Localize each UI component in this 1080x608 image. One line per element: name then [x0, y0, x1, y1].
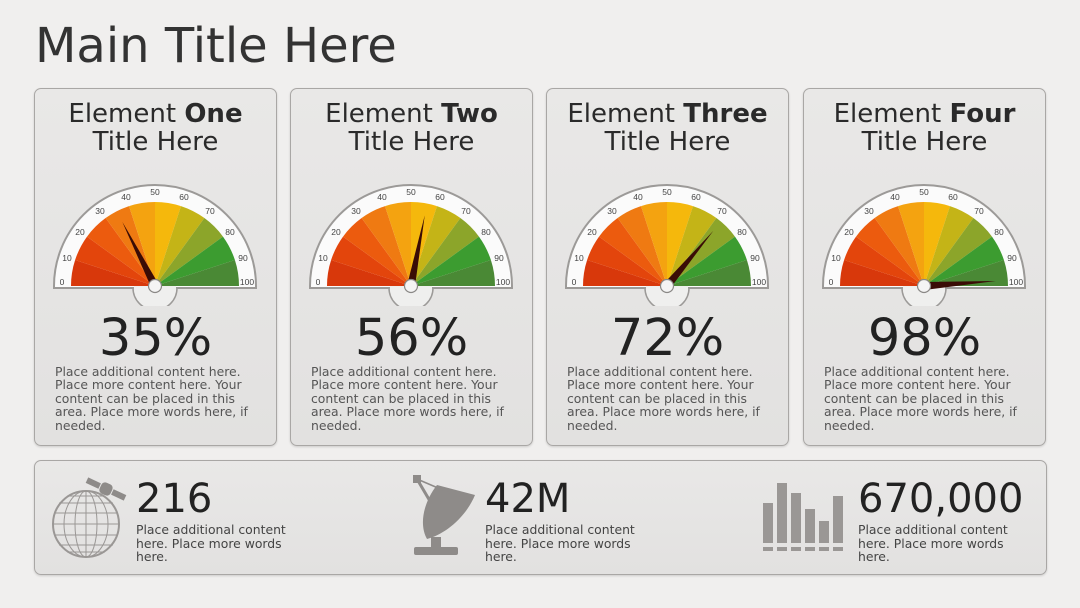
gauge — [309, 184, 513, 306]
panel title: Title Here — [349, 127, 474, 157]
panel title: Element Four — [834, 99, 1015, 129]
panel title — [834, 99, 1016, 157]
panel: element one — [34, 88, 277, 446]
panel: element four — [803, 88, 1046, 446]
stat: 670,000: 670,000 — [858, 476, 1023, 522]
panel title: Element Two — [325, 99, 498, 129]
panel title: Title Here — [605, 127, 730, 157]
stat text: Place additional content here. Place more words here. — [858, 522, 1008, 564]
icon: globe with satellite — [52, 478, 126, 558]
panel: element three — [546, 88, 789, 446]
stat: 216: 216 — [136, 476, 212, 522]
body text: Place additional content here. Place more content here. Your content can be placed in this area. Place more words here, if needed. — [311, 364, 504, 433]
percent: 35% — [99, 309, 212, 368]
panel title — [68, 99, 243, 157]
stat text: Place additional content here. Place more words here. — [485, 522, 635, 564]
percent: 56% — [355, 309, 468, 368]
panel title — [567, 99, 768, 157]
stat: 42M: 42M — [485, 476, 570, 522]
icon: satellite dish — [413, 475, 475, 555]
gauge — [565, 184, 769, 306]
gauge — [822, 184, 1026, 306]
panel: element two — [290, 88, 533, 446]
percent: 72% — [611, 309, 724, 368]
percent: 98% — [868, 309, 981, 368]
panel title: Title Here — [862, 127, 987, 157]
title: Main Title Here — [35, 18, 397, 74]
panel title: Title Here — [93, 127, 218, 157]
panel title: Element Three — [567, 99, 768, 129]
body text: Place additional content here. Place more content here. Your content can be placed in this area. Place more words here, if needed. — [55, 364, 248, 433]
gauge — [53, 184, 257, 306]
icon: bar chart — [763, 483, 843, 551]
body text: Place additional content here. Place more content here. Your content can be placed in this area. Place more words here, if needed. — [567, 364, 760, 433]
body text: Place additional content here. Place more content here. Your content can be placed in this area. Place more words here, if needed. — [824, 364, 1017, 433]
panel title: Element One — [68, 99, 243, 129]
panel title — [325, 99, 498, 157]
stat text: Place additional content here. Place more words here. — [136, 522, 286, 564]
panel: stats — [34, 460, 1047, 575]
